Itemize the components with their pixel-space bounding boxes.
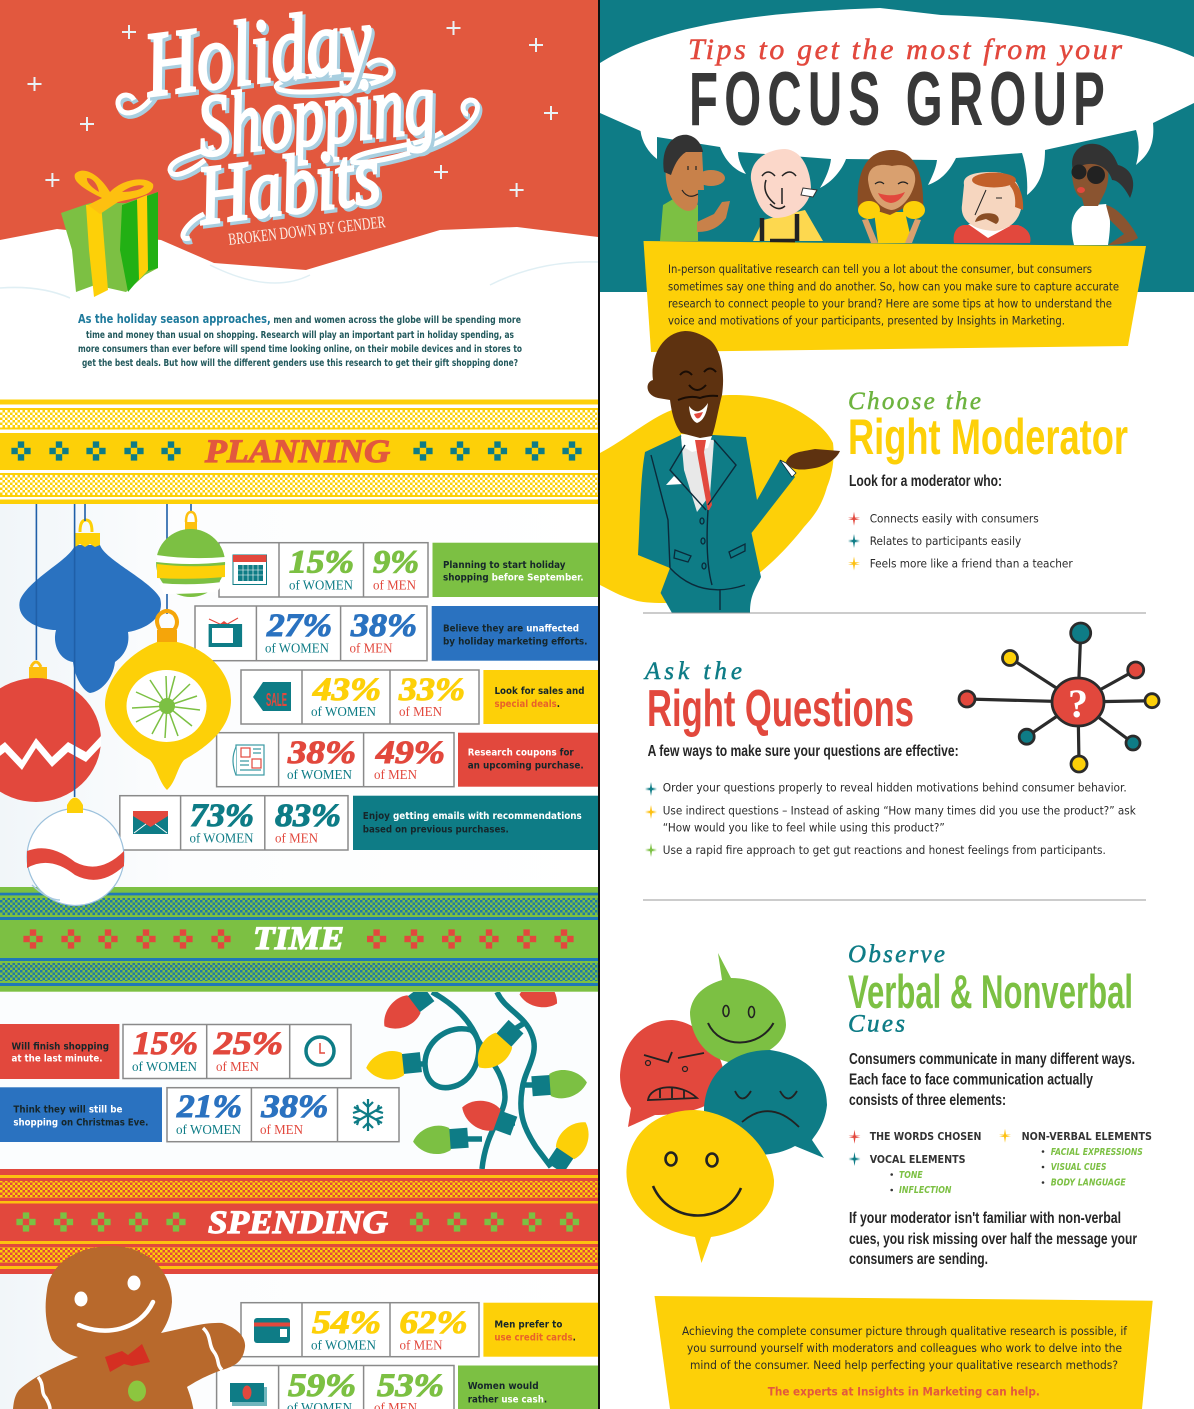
stat row: christmas eve: of MEN (260, 1123, 303, 1138)
title: holiday shopping habits: Habits (192, 128, 385, 243)
panel background tint (0, 504, 96, 1409)
label box: Look for sales and (494, 686, 584, 697)
yellow intro panel (644, 241, 1146, 352)
intro paragraph: As the holiday season approaches, men and women across the globe will be spending more (78, 312, 521, 326)
label box (0, 1024, 119, 1079)
intro paragraph (78, 312, 522, 369)
ornament: blue (19, 520, 161, 693)
intro paragraph: time and money than usual on shopping. Research will play an important part in holiday spending, as (86, 330, 514, 341)
stat row: sales and deals: of WOMEN (311, 705, 376, 720)
bulb: green right (531, 1070, 587, 1098)
stat row: emails (120, 796, 599, 850)
section: choose the right moderator: Feels more like a friend than a teacher (870, 556, 1073, 570)
band: planning (0, 400, 598, 504)
section: verbal and nonverbal cues: BODY LANGUAGE (1051, 1178, 1126, 1189)
icon: gift box (61, 171, 158, 297)
label box: Will finish shopping (12, 1041, 109, 1052)
label box: based on previous purchases. (363, 824, 509, 835)
section: right questions: A few ways to make sure your questions are effective: (648, 743, 959, 760)
stat row: emails: 83% (275, 798, 341, 834)
section: right questions: Ask the (643, 658, 742, 685)
ornament: green striped (156, 512, 225, 597)
characters (660, 135, 1138, 245)
yellow intro panel: sometimes say one thing and do another. So, how can you make sure to capture accurate (668, 280, 1119, 294)
yellow footer panel: you surround yourself with moderators and colleagues who work to delve into the (687, 1341, 1122, 1355)
person: man in green shirt (660, 135, 730, 241)
page background: snow (0, 0, 598, 1409)
stat row: last minute: of MEN (216, 1060, 259, 1075)
stat row: planning to start before September: of MEN (373, 578, 416, 593)
icon: calendar (233, 555, 266, 584)
title: holiday shopping habits (118, 0, 479, 246)
section: choose the right moderator: Connects easily with consumers (870, 512, 1039, 526)
stat row: christmas eve (0, 1087, 399, 1142)
band: spending (0, 1169, 598, 1274)
stat row: sales and deals: 33% (398, 672, 465, 708)
face: green smile (690, 953, 786, 1062)
section: verbal and nonverbal cues: If your moderator isn't familiar with non-verbal (849, 1210, 1121, 1227)
yellow intro panel: In-person qualitative research can tell you a lot about the consumer, but consumers (668, 262, 1092, 276)
band: time (0, 887, 598, 992)
intro paragraph: more consumers than ever before will spend time looking online, on their mobile devices and in stores to (78, 344, 522, 355)
label box (458, 1366, 598, 1409)
icon: question hub: ? (1068, 681, 1088, 726)
yellow footer panel: The experts at Insights in Marketing can help. (768, 1385, 1040, 1399)
label box: Believe they are unaffected (443, 624, 579, 635)
stat row: sales and deals: 43% (312, 672, 381, 708)
yellow intro panel: research to connect people to your brand? Here are some tips at how to understand the (668, 296, 1112, 310)
icon: cash (230, 1383, 267, 1406)
section: verbal and nonverbal cues: Cues (848, 1011, 905, 1038)
icon: envelope (133, 811, 168, 834)
stat row: cash: 59% (288, 1368, 356, 1404)
stat row: unaffected by marketing: 38% (350, 608, 417, 644)
stat row: unaffected by marketing: of MEN (350, 642, 392, 657)
stat row: coupons: 38% (287, 735, 356, 771)
stat row: last minute: 25% (213, 1026, 283, 1062)
stat row: unaffected by marketing: of WOMEN (265, 642, 329, 657)
bulb: yellow left (366, 1051, 422, 1080)
icon: television (209, 618, 242, 647)
yellow footer panel: Achieving the complete consumer picture through qualitative research is possible, if (682, 1324, 1128, 1338)
panel: holiday shopping habits (0, 0, 599, 1409)
label box: an upcoming purchase. (468, 760, 584, 771)
section: verbal and nonverbal cues: THE WORDS CHOSEN (870, 1130, 981, 1143)
icon: credit card (254, 1318, 290, 1343)
stat row: credit cards: 62% (400, 1305, 468, 1341)
label box: Planning to start holiday (443, 560, 566, 571)
label box: rather use cash. (468, 1394, 547, 1405)
section: verbal and nonverbal cues: VOCAL ELEMENTS (870, 1153, 966, 1166)
moderator suit (638, 435, 795, 613)
section: choose the right moderator: Look for a moderator who: (849, 473, 1002, 490)
moderator head (648, 331, 723, 438)
gingerbread man (5, 1246, 245, 1409)
stat row: planning to start before September: 9% (373, 545, 419, 581)
bulb: red top right (520, 992, 558, 1008)
band: spending: SPENDING (208, 1205, 388, 1241)
section: verbal and nonverbal cues: NON-VERBAL ELEMENTS (1022, 1130, 1152, 1143)
stat row: emails: of MEN (275, 832, 318, 846)
face: teal sad (704, 1050, 827, 1158)
section: right questions (643, 658, 1136, 857)
section: right questions: Order your questions properly to reveal hidden motivations behind consumer behavior. (663, 781, 1127, 795)
stat row: planning to start before September: 15% (289, 545, 354, 581)
stat row: emails: 73% (190, 798, 254, 834)
section: choose the right moderator: Choose the (848, 388, 981, 415)
band: planning: PLANNING (204, 434, 390, 470)
person: bald older man (751, 149, 823, 241)
stat row: last minute: 15% (133, 1026, 198, 1062)
stat row: unaffected by marketing (195, 606, 599, 661)
section: verbal and nonverbal cues: FACIAL EXPRESSIONS (1051, 1147, 1143, 1158)
icon: snowflake (353, 1099, 383, 1131)
bulb: red top left (384, 992, 434, 1029)
stat row: last minute: of WOMEN (132, 1060, 197, 1075)
stat row: cash: 53% (377, 1368, 444, 1404)
bulb: yellow right (543, 1114, 597, 1176)
label box: by holiday marketing efforts. (443, 636, 588, 647)
stat row: christmas eve: of WOMEN (176, 1123, 241, 1138)
section: verbal and nonverbal cues: consists of three elements: (849, 1092, 1006, 1109)
stat row: credit cards: of WOMEN (311, 1338, 376, 1354)
face: red angry (620, 1020, 725, 1127)
stat row: christmas eve: 21% (176, 1089, 242, 1125)
section: right questions: Use indirect questions – Instead of asking “How many times did you use the product?” ask (663, 803, 1136, 817)
panel: focus group (600, 0, 1194, 1409)
ornament strings (36, 504, 191, 797)
stat row: sales and deals (241, 670, 598, 724)
title: holiday shopping habits: Shopping (193, 55, 440, 176)
stat row: coupons: of MEN (374, 768, 417, 783)
section: verbal and nonverbal cues: TONE (899, 1170, 923, 1181)
label box: special deals. (494, 699, 560, 710)
bulb: red middle (457, 1094, 519, 1139)
person: woman in yellow dress (858, 150, 925, 243)
illustration: speech bubble faces (620, 953, 827, 1263)
icon: coupon newspaper (233, 745, 264, 775)
header red sky with snow line (0, 0, 598, 270)
string of lights (366, 992, 589, 1169)
section: verbal and nonverbal cues: Observe (848, 941, 945, 968)
label box (458, 733, 598, 787)
icon: sale tag (253, 682, 291, 711)
sparkles (28, 21, 558, 197)
snow drift lines (0, 262, 598, 298)
section: verbal and nonverbal cues: consumers are sending. (849, 1251, 988, 1268)
label box (432, 543, 598, 597)
stat row: coupons: of WOMEN (287, 768, 352, 783)
moderator hand (786, 449, 840, 470)
intro paragraph: get the best deals. But how will the different genders use this research to get their gift shopping done? (82, 358, 518, 369)
section: choose the right moderator: Relates to participants easily (870, 534, 1021, 548)
section: right questions: “How would you like to feel while using this product?” (663, 821, 945, 835)
stat row: coupons (217, 733, 598, 787)
face: yellow happy (626, 1110, 774, 1263)
title: holiday shopping habits: Shopping (196, 58, 443, 179)
label box: Think they will still be (13, 1104, 123, 1115)
label box (483, 670, 598, 724)
label box: at the last minute. (12, 1054, 102, 1065)
bulb: green left (412, 1124, 469, 1156)
ornament: red (0, 662, 101, 802)
band: time: TIME (253, 921, 344, 957)
person: man with moustache (954, 172, 1030, 243)
label box: use credit cards. (494, 1333, 576, 1344)
section: right questions: Use a rapid fire approach to get gut reactions and honest feelings from participants. (663, 843, 1106, 857)
stat row: credit cards: of MEN (400, 1338, 442, 1354)
stat row: coupons: 49% (375, 735, 445, 771)
section: right questions: Right Questions (647, 680, 914, 738)
label box: Women would (468, 1381, 539, 1392)
subtitle: broken down by gender: BROKEN DOWN BY GENDER (227, 212, 387, 249)
illustration: moderator (600, 331, 840, 613)
stat row: last minute (0, 1024, 351, 1079)
icon: sale tag: SALE (266, 690, 287, 710)
label box: Men prefer to (494, 1320, 563, 1331)
person: woman with sunglasses (1072, 144, 1138, 245)
section: verbal and nonverbal cues: VISUAL CUES (1051, 1162, 1107, 1173)
label box: Research coupons for (468, 748, 574, 759)
heading: tips script: Tips to get the most from your (688, 33, 1122, 66)
icon: question hub (959, 623, 1159, 772)
stat row: credit cards (241, 1303, 598, 1357)
bulb: yellow middle (478, 1020, 524, 1068)
stat row: christmas eve: 38% (260, 1089, 328, 1125)
stat row: emails: of WOMEN (190, 832, 254, 846)
ornament: white with red wave (27, 798, 124, 906)
label box (483, 1303, 598, 1357)
yellow intro panel: voice and motivations of your participants, presented by Insights in Marketing. (668, 314, 1065, 328)
yellow footer panel (654, 1296, 1153, 1409)
stat row: sales and deals: of MEN (399, 705, 442, 720)
label box: Enjoy getting emails with recommendations (363, 811, 582, 822)
section: verbal and nonverbal cues: INFLECTION (899, 1185, 952, 1196)
stat row: credit cards: 54% (312, 1305, 381, 1341)
header teal background (600, 0, 1194, 292)
label box: shopping on Christmas Eve. (13, 1118, 148, 1129)
title: holiday shopping habits: Habits (195, 131, 388, 246)
ornaments (0, 504, 231, 906)
section: choose the right moderator (848, 388, 1128, 570)
label box (432, 606, 599, 661)
icon: clock (306, 1037, 334, 1065)
label box (353, 796, 598, 850)
label box (0, 1087, 162, 1142)
yellow footer panel: mind of the consumer. Need help perfecting your qualitative research methods? (690, 1358, 1118, 1372)
speech bubble (600, 8, 1194, 195)
yellow blob (600, 395, 834, 603)
stat row: planning to start before September (219, 543, 598, 597)
stat row: cash (217, 1366, 598, 1409)
center divider line (598, 0, 600, 1409)
stat row: unaffected by marketing: 27% (266, 608, 332, 644)
label box: shopping before September. (443, 572, 584, 584)
section: verbal and nonverbal cues: Each face to face communication actually (849, 1072, 1093, 1088)
stat row: planning to start before September: of WOMEN (289, 578, 353, 593)
moderator cuff (780, 460, 796, 477)
section: verbal and nonverbal cues (848, 941, 1152, 1268)
ornament: yellow with burst (105, 611, 231, 790)
